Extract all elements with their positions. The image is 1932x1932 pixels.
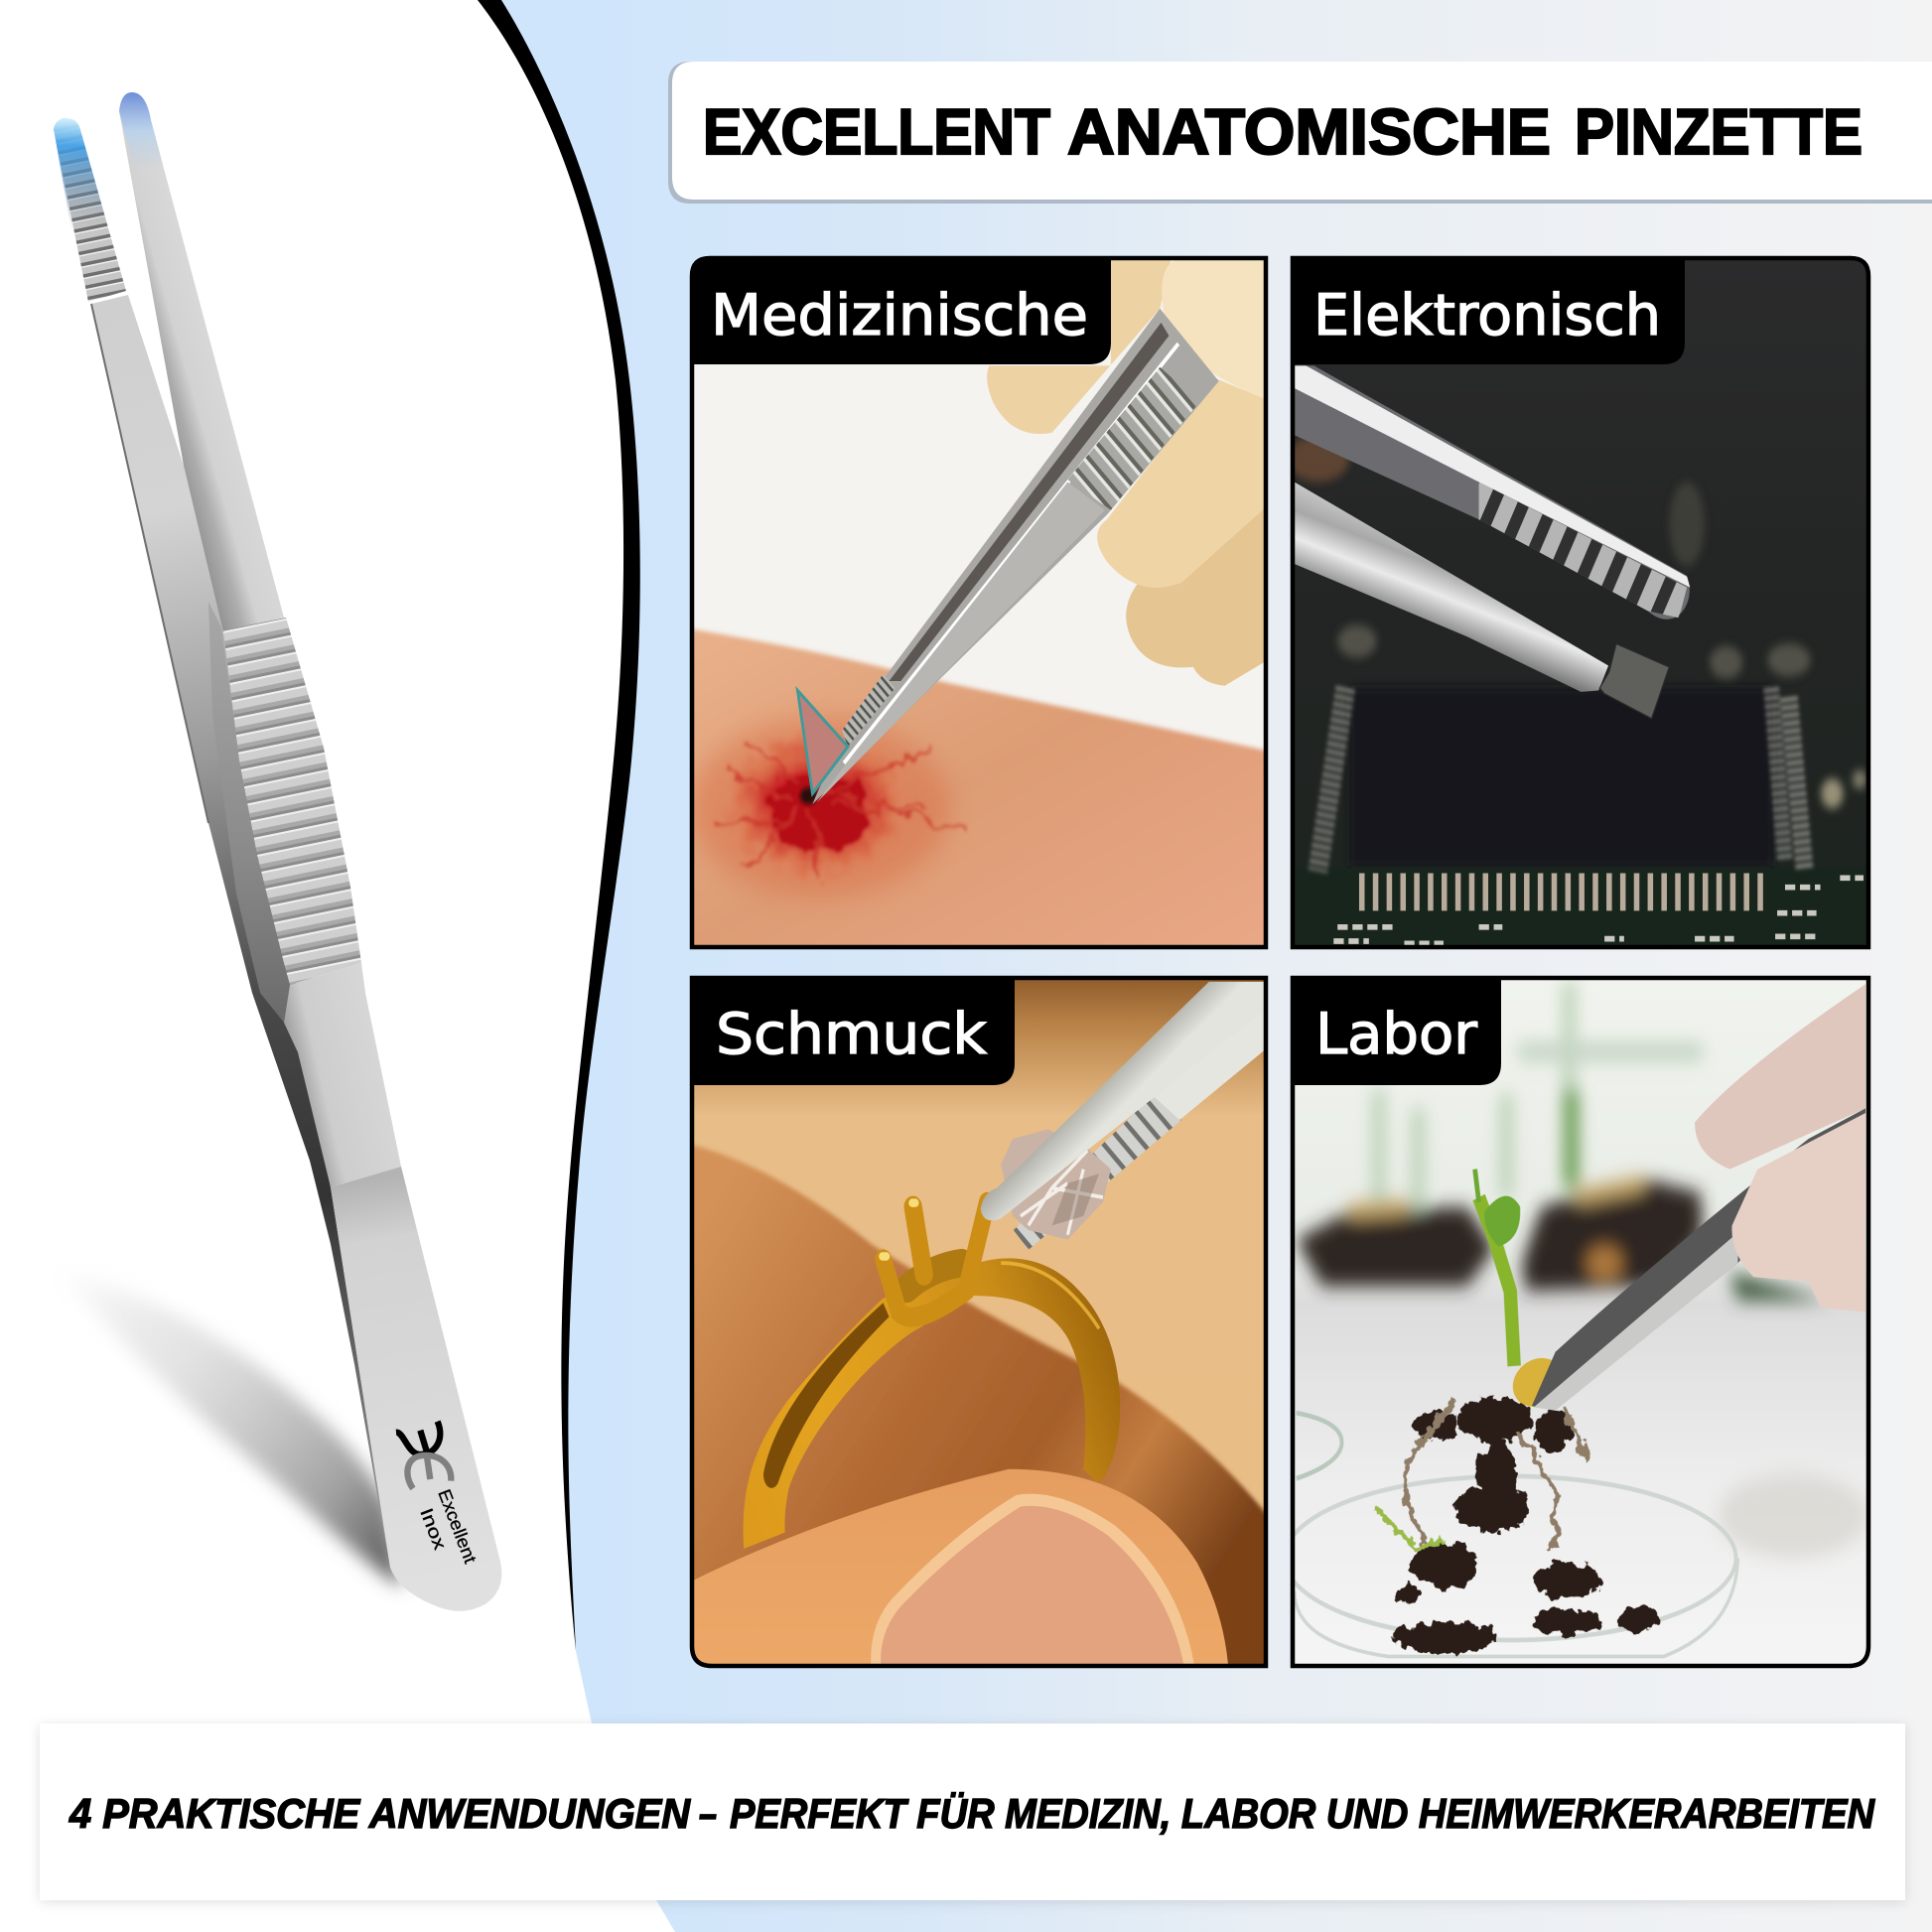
- label box: [1291, 976, 1501, 1085]
- banner shadow edge: [668, 62, 1932, 204]
- front finger with nail: [691, 1469, 1229, 1671]
- label text: Medizinische: [711, 283, 1088, 348]
- skin: [694, 626, 1264, 945]
- tweezers rounded blade: [981, 982, 1268, 1220]
- petri dish: [1285, 1413, 1738, 1657]
- panel frame: [1293, 978, 1868, 1666]
- blurred lights: [1287, 435, 1866, 808]
- warm background: [694, 980, 1264, 1515]
- serrated grip: [223, 618, 361, 985]
- caption: 4 PRAKTISCHE ANWENDUNGEN: [69, 1790, 692, 1837]
- tweezers: [812, 309, 1219, 804]
- panel frame: [692, 978, 1266, 1666]
- side pins: [1317, 688, 1805, 871]
- heading: [703, 95, 1863, 168]
- caption: –: [699, 1790, 717, 1837]
- back arm: [91, 295, 390, 1568]
- tweezers: [1532, 1108, 1865, 1411]
- product: tweezers: [54, 92, 501, 1611]
- caption: [69, 1790, 1876, 1837]
- middle plate: [284, 963, 401, 1187]
- ring prongs: [883, 1202, 987, 1317]
- shadow of tweezers: [54, 1268, 402, 1588]
- banner box: [672, 62, 1932, 200]
- glove lower finger: [1731, 1113, 1865, 1312]
- heading: ANATOMISCHE: [1067, 95, 1551, 168]
- glove upper finger: [1695, 984, 1865, 1170]
- back finger: [687, 1144, 1272, 1675]
- label text: Schmuck: [716, 1002, 987, 1067]
- white left region: [0, 0, 675, 1932]
- front arm upper blade: [119, 92, 284, 632]
- diamond: [1001, 1130, 1111, 1239]
- upper tweezer arm: [1295, 365, 1690, 620]
- gold ring: [744, 1258, 1120, 1549]
- logo: Excellent Inox: Inox: [416, 1505, 450, 1553]
- lower tweezer arm: [1295, 482, 1608, 692]
- tweezers lower blade: [1154, 1005, 1268, 1120]
- seed: [1513, 1358, 1552, 1408]
- gloved fingers: [987, 257, 1268, 686]
- back arm serrated tip: [54, 118, 126, 302]
- label box: [690, 976, 1015, 1085]
- solder spots: [1333, 878, 1863, 943]
- ring dark reflection: [763, 1303, 889, 1488]
- dark background: [1295, 260, 1866, 869]
- label text: Elektronisch: [1313, 283, 1661, 348]
- bottom pins: [1358, 874, 1763, 911]
- label box: [1291, 256, 1685, 364]
- blurred soil pots and seedlings: [1297, 982, 1867, 1558]
- ring highlight: [1001, 1263, 1099, 1328]
- plant stem and leaf: [1475, 1170, 1520, 1366]
- panel frame: [1293, 258, 1868, 947]
- label text: Labor: [1315, 1002, 1478, 1067]
- panel: Medizinische: [689, 256, 1269, 949]
- heading: PINZETTE: [1575, 95, 1863, 168]
- title banner: [668, 62, 1932, 204]
- glass shard: [797, 690, 848, 793]
- microchip: [1287, 435, 1875, 953]
- lab background: [1295, 1048, 1866, 1664]
- panel: Schmuck: [687, 976, 1272, 1675]
- lower plate with rounded end: [331, 1167, 501, 1611]
- logo: Excellent Inox: [396, 1422, 481, 1566]
- roots with soil: [1375, 1397, 1657, 1653]
- panel: Elektronisch: [1287, 252, 1875, 955]
- front arm side edge: [208, 602, 290, 1023]
- bottom banner: [40, 1724, 1905, 1900]
- banner box: [40, 1724, 1905, 1900]
- panel frame: [692, 258, 1266, 947]
- logo text: Excellent: [434, 1486, 481, 1566]
- panel: Labor: [1285, 976, 1871, 1671]
- tweezers serrated part: [1014, 1094, 1181, 1250]
- logo mark: [396, 1422, 451, 1488]
- heading: EXCELLENT: [703, 95, 1050, 168]
- back arm left edge: [91, 304, 208, 823]
- black curved stripe: [478, 0, 640, 1651]
- small component: [1599, 643, 1669, 719]
- blood wound: [691, 719, 966, 897]
- label box: [690, 256, 1111, 364]
